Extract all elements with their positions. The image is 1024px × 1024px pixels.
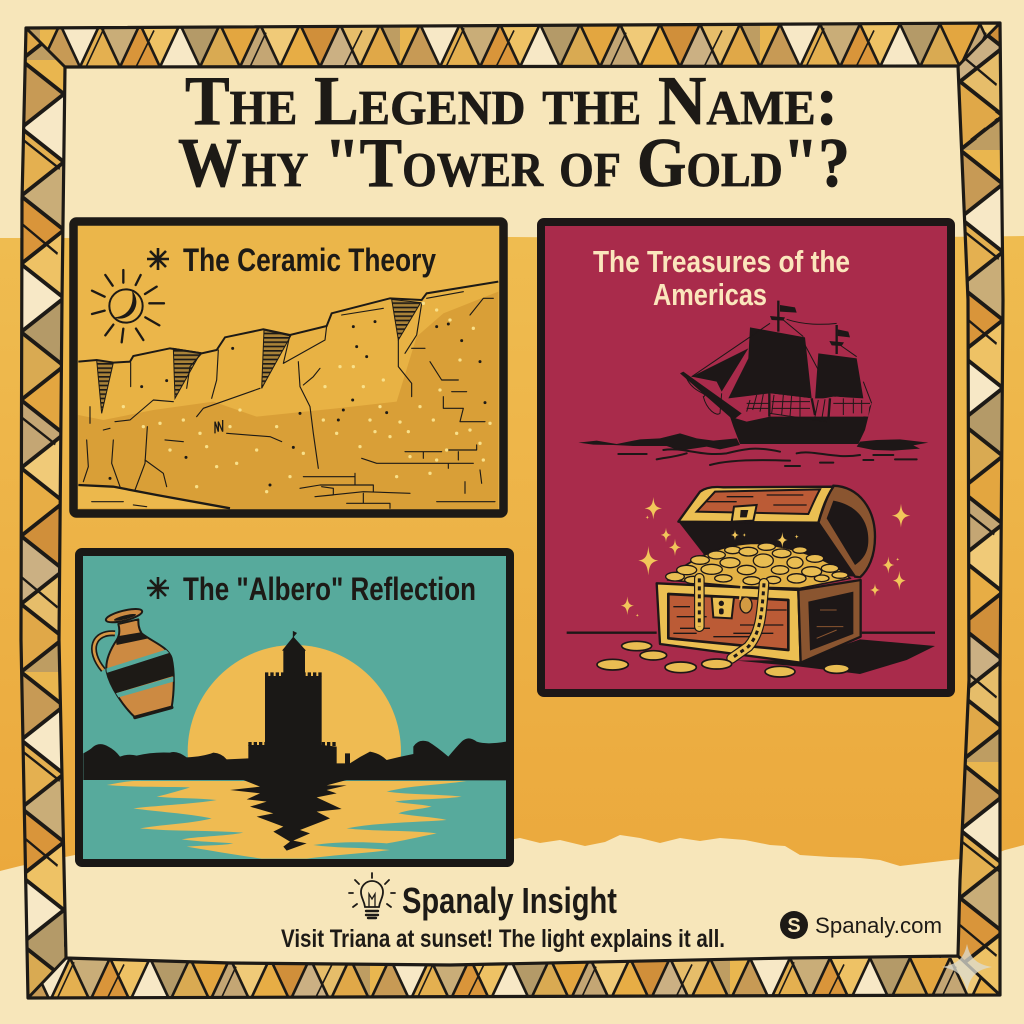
heading: the ceramic theory: The Ceramic Theory (183, 242, 436, 278)
background: torn gold wash band (0, 236, 1024, 871)
watermark sparkle (942, 944, 992, 992)
heading: the treasures of the americas: The Treasures of the (593, 244, 850, 279)
icon: asterisk (147, 248, 169, 270)
illustration: sunset over tower and river (83, 632, 506, 859)
heading: the treasures of the americas (593, 244, 850, 312)
icon: asterisk (147, 577, 169, 599)
heading: spanaly insight: Spanaly Insight (402, 880, 617, 921)
coins on the ground (597, 641, 849, 677)
title (178, 63, 850, 202)
icon: sun (92, 270, 164, 342)
text: tip: Visit Triana at sunset! The light explains it all. (281, 925, 725, 953)
icon: ceramic jug (94, 606, 174, 717)
insight section (281, 873, 725, 953)
logo: spanaly.com: Spanaly.com (815, 913, 942, 938)
logo: spanaly.com (780, 911, 942, 939)
icon: light bulb (349, 873, 395, 918)
logo: spanaly.com: S (787, 915, 801, 937)
panel: the ceramic theory (74, 222, 504, 514)
title: The Legend the Name: (185, 63, 838, 140)
sparkles (621, 497, 910, 617)
illustration: galleon ship (680, 301, 872, 444)
panel: the albero reflection (79, 552, 510, 863)
panel: the treasures of the americas (541, 222, 951, 693)
heading: the treasures of the americas: Americas (653, 277, 767, 312)
illustration: treasure chest (567, 486, 935, 677)
illustration: sandstone wall (78, 282, 498, 509)
illustration: sea waves (578, 433, 928, 466)
heading: the albero reflection: The "Albero" Reflection (183, 571, 476, 607)
title: Why "Tower of Gold"? (178, 125, 850, 202)
